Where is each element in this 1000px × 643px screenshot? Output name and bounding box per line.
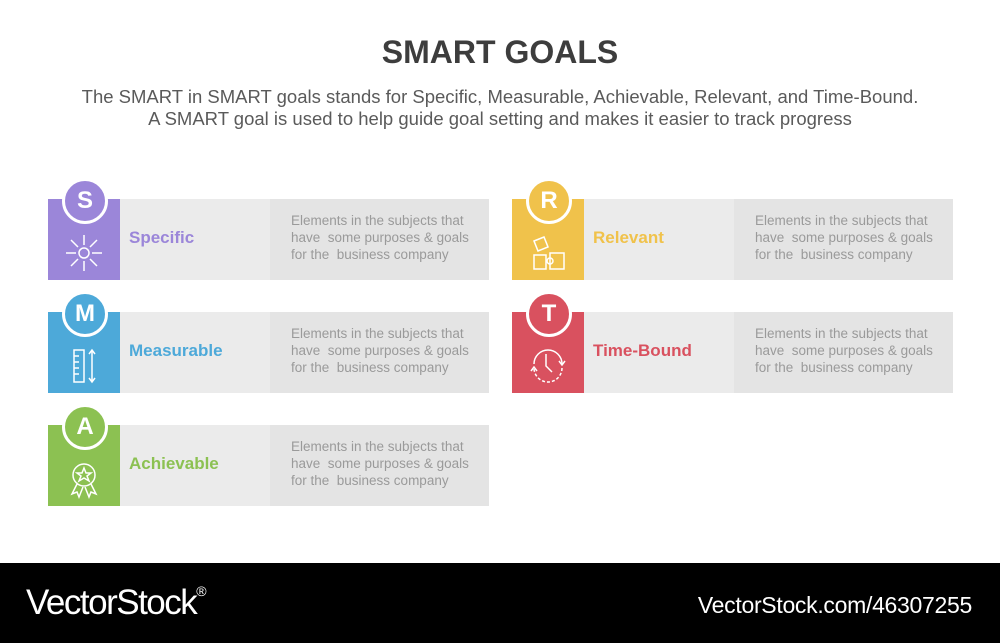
card: Measurable: Measurable xyxy=(129,341,223,360)
card: Specific: S xyxy=(77,187,93,214)
card: Time-Bound: Elements in the subjects that xyxy=(755,326,928,341)
card: Relevant: for the business company xyxy=(755,247,913,262)
card: Achievable: Elements in the subjects that xyxy=(291,439,464,454)
card: Time-Bound: Time-Bound xyxy=(593,341,692,360)
card: Measurable: Elements in the subjects that xyxy=(291,326,464,341)
card: Specific: Specific xyxy=(129,228,194,247)
card: Measurable: have some purposes & goals xyxy=(291,343,469,358)
title: SMART GOALS xyxy=(382,34,618,70)
card: Achievable: A xyxy=(76,413,94,440)
card: Achievable xyxy=(48,407,489,506)
card: Measurable: for the business company xyxy=(291,360,449,375)
card: Achievable: Achievable xyxy=(129,454,219,473)
footer bar xyxy=(0,563,1000,643)
card: Relevant: have some purposes & goals xyxy=(755,230,933,245)
subtitle: The SMART in SMART goals stands for Specific, Measurable, Achievable, Relevant, and Time-Bound. xyxy=(82,86,918,107)
card: Specific: for the business company xyxy=(291,247,449,262)
subtitle: A SMART goal is used to help guide goal setting and makes it easier to track progress xyxy=(148,108,852,129)
card: Time-Bound xyxy=(512,294,953,393)
card: Measurable: M xyxy=(75,300,95,327)
icon: target arrows xyxy=(66,235,102,271)
card: Achievable: for the business company xyxy=(291,473,449,488)
card: Specific: Elements in the subjects that xyxy=(291,213,464,228)
icon: clock xyxy=(530,349,566,383)
card: Relevant xyxy=(512,181,953,280)
card: Relevant: R xyxy=(540,187,558,214)
footer url: VectorStock.com/46307255 xyxy=(698,592,972,618)
card: Time-Bound: have some purposes & goals xyxy=(755,343,933,358)
subtitle xyxy=(82,86,918,129)
card: Achievable: have some purposes & goals xyxy=(291,456,469,471)
card: Specific: have some purposes & goals xyxy=(291,230,469,245)
icon: ruler xyxy=(73,348,96,384)
card: Measurable xyxy=(48,294,489,393)
card: Specific xyxy=(48,181,489,280)
icon: puzzle xyxy=(533,236,565,270)
card: Relevant: Relevant xyxy=(593,228,664,247)
card: Time-Bound: for the business company xyxy=(755,360,913,375)
card: Time-Bound: T xyxy=(542,300,556,327)
icon: award xyxy=(70,463,98,499)
card: Relevant: Elements in the subjects that xyxy=(755,213,928,228)
footer logo: VectorStock® xyxy=(26,583,205,622)
